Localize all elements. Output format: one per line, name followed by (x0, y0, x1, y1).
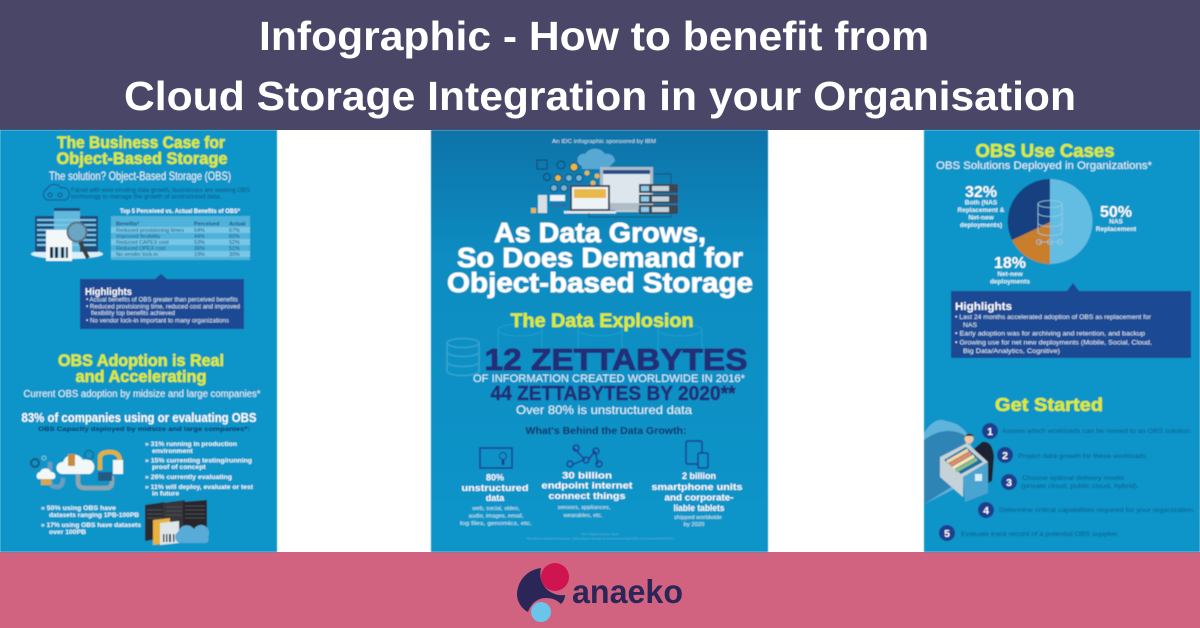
title (124, 13, 1076, 119)
icon: tablet and phone (686, 441, 708, 468)
footnotes: IDC's Digital Universe Study (581, 532, 619, 536)
column: 80 percent unstructured: unstructured (462, 483, 528, 493)
footer band (0, 552, 1200, 628)
steps list (939, 423, 1195, 541)
table: perceived vs actual benefits: 36% (194, 246, 205, 252)
text: unstructured share: Over 80% is unstructured data (516, 403, 692, 417)
column: 80 percent unstructured: log files, genomics, etc. (460, 521, 532, 527)
table: perceived vs actual benefits: 52% (229, 240, 240, 246)
label: 32 percent: Both (NAS (965, 200, 998, 206)
step 2: 2 (1002, 450, 1008, 462)
list: deployment bullets: in future (152, 490, 179, 498)
list: deployment bullets: » 11% will deploy, evaluate or test (145, 484, 254, 491)
subheading: current adoption: Current OBS adoption by midsize and large companies* (24, 389, 261, 400)
step 3: 3 (1006, 477, 1012, 489)
column: 2 billion devices: liable tablets (674, 503, 724, 513)
illustration: devices and cloud (531, 149, 678, 217)
step 1 (982, 423, 1192, 439)
icon: database in pie (1036, 200, 1062, 244)
list: deployment bullets: » 31% running in production (145, 441, 237, 448)
table: perceived vs actual benefits: 60% (229, 234, 240, 240)
table: perceived vs actual benefits: Reduced OPEX cost (116, 246, 166, 252)
list: deployment bullets: environment (152, 448, 194, 455)
callout: highlights (80, 274, 244, 329)
text: information created: OF INFORMATION CREATED WORLDWIDE IN 2016* (473, 373, 746, 385)
subheading: solution: The solution? Object-Based Storage (OBS) (49, 169, 231, 183)
table: perceived vs actual benefits: No vendor lock-in (116, 252, 158, 258)
column: 80 percent unstructured (460, 448, 532, 527)
footnotes: *IDC Market Analysis Perspective: Object-Based Storage for Unstructured Data 2016, Document #US41769317 (526, 536, 674, 540)
table: perceived vs actual benefits: 44% (194, 234, 205, 240)
stat: 83 percent: 83% of companies using or evaluating OBS (22, 411, 256, 425)
table: perceived vs actual benefits (111, 216, 250, 260)
logo: anaeko (517, 563, 683, 622)
title: Infographic - How to benefit from (259, 13, 929, 59)
column: 80 percent unstructured: 80% (486, 472, 504, 482)
column: 80 percent unstructured: audio, images, email, (469, 514, 524, 520)
label: 50 percent: NAS (1109, 218, 1124, 226)
callout: highlights: Highlights (85, 286, 132, 298)
subheading: solutions deployed: OBS Solutions Deployed in Organizations* (936, 160, 1153, 172)
column: 80 percent unstructured: data (486, 493, 505, 503)
table: perceived vs actual benefits: 19% (194, 252, 205, 258)
list: deployment bullets: » 15% currenting testing/running (145, 458, 252, 464)
label: 50 percent: Replacement (1096, 226, 1137, 233)
heading: adoption (58, 352, 224, 386)
label: 50 percent (1096, 204, 1137, 233)
table: perceived vs actual benefits: 53% (194, 240, 205, 246)
column: 30 billion endpoints: 30 billion (562, 470, 612, 480)
step 3: Choose optimal delivery model (1022, 475, 1125, 482)
callout: highlights: NAS (963, 322, 977, 329)
callout: highlights: • Reduced provisioning time, reduced cost and improved (86, 304, 240, 310)
heading: adoption: and Accelerating (76, 368, 206, 386)
column: 2 billion devices: by 2020 (684, 522, 704, 528)
column: 30 billion endpoints (542, 445, 632, 519)
label: 32 percent (958, 184, 1005, 229)
callout: highlights: flexibility top benefits achieved (91, 311, 175, 317)
icon: cloud people (43, 184, 69, 200)
intro paragraph (71, 188, 250, 200)
callout: highlights: • Last 24 months accelerated adoption of OBS as replacement for (955, 314, 1152, 321)
step 3: (private cloud, public cloud, hybrid). (1021, 483, 1139, 490)
callout: highlights: • No vendor lock-in important to many organizations (86, 318, 229, 324)
icon: network nodes (567, 445, 602, 467)
step 4 (978, 502, 1195, 518)
logo: anaeko: anaeko (572, 573, 683, 610)
title: Cloud Storage Integration in your Organisation (124, 73, 1076, 119)
step 2: Project data growth for these workloads. (1018, 453, 1148, 460)
table: perceived vs actual benefits: Benefits* (116, 222, 140, 228)
list: deployment bullets: proof of concept (152, 464, 206, 471)
label: 32 percent: 32% (965, 184, 997, 201)
list: deployment bullets (145, 441, 254, 498)
label: 32 percent: Replacement & (958, 207, 1005, 214)
main title (447, 217, 753, 298)
panel: centre infographic (431, 130, 768, 552)
list: dataset bullets: datasets ranging 1PB-100PB (49, 512, 139, 519)
step 5: 5 (944, 528, 950, 540)
heading: business case (56, 134, 228, 168)
heading: get started: Get Started (995, 395, 1103, 415)
list: dataset bullets: » 17% using OBS have datasets (41, 522, 141, 529)
header banner (0, 0, 1200, 130)
list: dataset bullets (41, 505, 141, 536)
illustration: file drawer in cloud (924, 420, 994, 504)
heading: data explosion: The Data Explosion (510, 311, 694, 332)
step 4: Determine critical capabilities required for your organization. (999, 507, 1195, 514)
table: perceived vs actual benefits: Reduced provisioning times (116, 228, 184, 234)
callout: highlights: Big Data/Analytics, Cognitive) (963, 348, 1060, 355)
main title: So Does Demand for (457, 242, 743, 273)
table title: Top 5 Perceived vs. Actual Benefits of OBS* (120, 208, 240, 215)
intro paragraph: technology to manage the growth of unstructured data. (71, 194, 221, 200)
column: 2 billion devices: shipped worldwide (674, 515, 722, 521)
column: 2 billion devices: smartphone units (652, 482, 742, 492)
icon: faint database background (447, 338, 479, 376)
label: 18 percent: 18% (994, 255, 1026, 272)
main title: As Data Grows, (494, 217, 706, 248)
list: deployment bullets: » 26% currently evaluating (145, 474, 232, 481)
column: 30 billion endpoints: connect things (548, 491, 626, 501)
heading: behind the growth: What's Behind the Data Growth: (526, 425, 686, 437)
step 1: Assess which workloads can be moved to an OBS solution. (1002, 428, 1192, 435)
intro paragraph: Faced with ever-eroding data growth, businesses are seeking OBS (71, 188, 250, 194)
panel: left infographic (0, 130, 277, 552)
list: dataset bullets: » 50% using OBS have (41, 505, 116, 512)
column: 30 billion endpoints: wearables, etc. (562, 513, 603, 519)
step 5 (939, 525, 1119, 541)
label: 32 percent: deployments) (960, 222, 1002, 229)
callout: highlights (951, 283, 1191, 358)
footnotes (526, 532, 674, 540)
table: perceived vs actual benefits: 30% (229, 252, 240, 258)
stat: 12 zettabytes: 12 ZETTABYTES (484, 342, 748, 377)
label: 18 percent (990, 255, 1030, 286)
step 4: 4 (983, 505, 989, 517)
icon: faint cylinders behind heading (498, 324, 702, 356)
callout: highlights: • Early adoption was for archiving and retention, and backup (955, 330, 1145, 338)
column: 2 billion devices: and corporate- (664, 492, 734, 502)
heading: use cases: OBS Use Cases (976, 140, 1114, 161)
step 5: Evaluate track record of a potential OBS supplier. (961, 531, 1119, 538)
callout: highlights: • Growing use for net new deployments (Mobile, Social, Cloud, (955, 340, 1152, 346)
label: 32 percent: Net-new (968, 214, 995, 222)
column: 30 billion endpoints: sensors, appliances, (558, 505, 611, 511)
column: 2 billion devices (652, 441, 742, 528)
capacity label: OBS Capacity deployed by midsize and large companies*: (38, 426, 250, 433)
step 2 (997, 447, 1148, 463)
illustration: servers and cloud (145, 500, 209, 545)
step 3 (1001, 474, 1139, 490)
label: 18 percent: deployments (990, 278, 1030, 286)
main title: Object-based Storage (447, 267, 753, 298)
table: perceived vs actual benefits: Perceived (194, 222, 219, 228)
panel: right infographic (924, 130, 1200, 552)
stat: 44 zettabytes: 44 ZETTABYTES BY 2020** (490, 383, 736, 405)
label: 18 percent: Net-new (997, 271, 1024, 278)
heading: business case: Object-Based Storage (56, 150, 228, 168)
list: dataset bullets: over 100PB (49, 529, 86, 536)
column: 80 percent unstructured: web, social, video, (471, 506, 520, 512)
table: perceived vs actual benefits: Improved flexibility (116, 234, 161, 240)
illustration: cloud pipeline (31, 450, 123, 488)
illustration: building and magnifier (31, 208, 103, 261)
column: 2 billion devices: 2 billion (682, 471, 716, 481)
label: 50 percent: 50% (1100, 204, 1132, 221)
column: 30 billion endpoints: endpoint internet (542, 480, 632, 490)
pie chart (1008, 179, 1092, 264)
heading: business case: The Business Case for (57, 134, 226, 152)
icon: screen with bulb (480, 448, 512, 468)
callout: highlights: • Actual benefits of OBS greater than perceived benefits (86, 298, 238, 304)
table: perceived vs actual benefits: 51% (229, 246, 240, 252)
table: perceived vs actual benefits: 54% (194, 228, 205, 234)
callout: highlights: Highlights (955, 301, 1012, 313)
table: perceived vs actual benefits: Actual (229, 222, 246, 228)
sponsor line: An IDC infographic sponsored by IBM (552, 139, 656, 145)
step 1: 1 (987, 426, 993, 438)
heading: adoption: OBS Adoption is Real (58, 352, 224, 370)
table: perceived vs actual benefits: 67% (229, 228, 240, 234)
table: perceived vs actual benefits: Reduced CAPEX cost (116, 240, 169, 246)
